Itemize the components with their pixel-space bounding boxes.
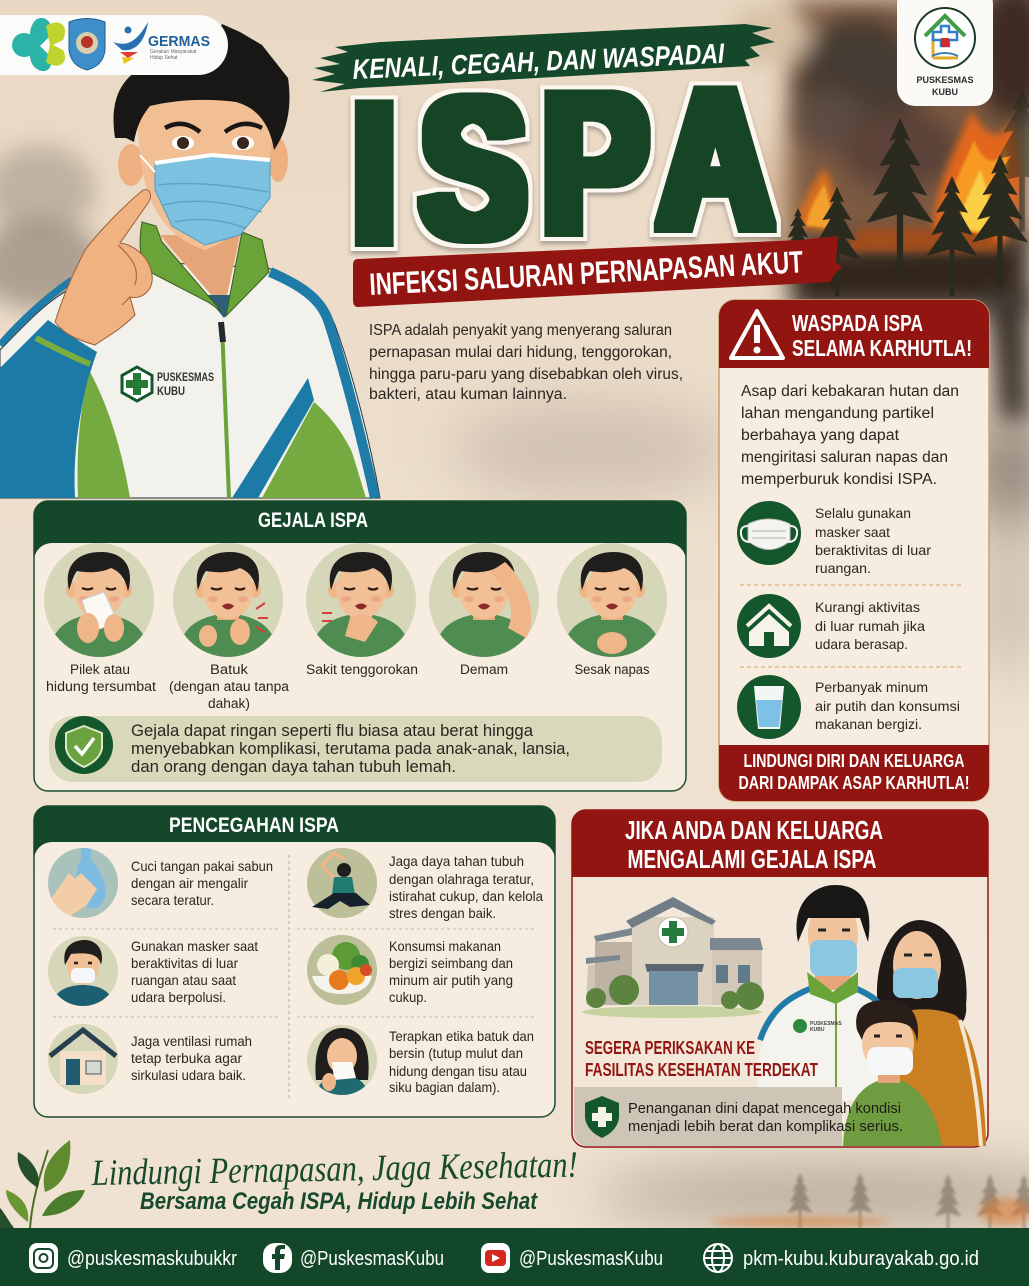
note: gejala: Gejala dapat ringan seperti flu biasa atau berat hingga [131,722,534,740]
note: early treatment: menjadi lebih berat dan komplikasi serius. [628,1119,903,1135]
tip: daya tahan: istirahat cukup, dan kelola [389,888,543,904]
note: early treatment: Penanganan dini dapat mencegah kondisi [628,1101,901,1117]
symptom: pilek [44,543,156,694]
tip: cuci tangan: Cuci tangan pakai sabun [131,858,273,874]
tip: cuci tangan [131,858,273,908]
footer bar: @PuskesmasKubu [300,1248,444,1270]
puskesmas badge [897,0,993,106]
panel: waspada ispa selama karhutla: WASPADA ISPA [792,310,923,336]
panel: waspada ispa selama karhutla [719,300,989,801]
footer bar: @PuskesmasKubu [519,1248,663,1270]
icon: puskesmas logo [915,8,975,68]
tip 2: Kurangi aktivitas [815,599,920,615]
tip: masker: ruangan atau saat [131,972,236,988]
symptom: batuk [169,543,289,711]
father [757,885,895,1100]
tip 1: ruangan. [815,560,871,576]
tip 2: di luar rumah jika [815,618,925,634]
intro text: hingga paru-paru yang disebabkan oleh virus, [369,366,683,383]
header logo pill [0,15,228,75]
icon: house ventilation [48,1024,118,1094]
tip 3: Perbanyak minum [815,679,928,695]
tip: makanan [389,938,513,1005]
symptom: demam: Demam [460,662,508,677]
title banner: green brush [312,24,775,92]
puskesmas badge: PUSKESMAS [916,75,974,85]
symptom: pilek: Pilek atau [70,662,130,677]
tip: daya tahan: stres dengan baik. [389,905,496,921]
logo on jacket: KUBU [157,384,185,398]
tip: ventilasi: Jaga ventilasi rumah [131,1033,252,1049]
footer bar: @puskesmaskubukkr [67,1248,237,1270]
symptom: batuk: dahak) [208,696,250,711]
panel: jika anda dan keluarga [572,810,988,1147]
waspada body text: lahan mengandung partikel [741,405,934,422]
tip: makanan: Konsumsi makanan [389,938,501,954]
icon: germas logo: GERMAS [148,34,210,50]
symptom: sesak napas [557,543,667,677]
panel: waspada ispa selama karhutla: SELAMA KARHUTLA! [792,335,972,361]
note: gejala: dan orang dengan daya tahan tubuh lemah. [131,758,456,776]
tip: etika batuk: hidung dengan tisu atau [389,1063,527,1079]
slogan: Lindungi Pernapasan, Jaga Kesehatan! [91,1145,578,1194]
tip: etika batuk: Terapkan etika batuk dan [389,1028,534,1044]
slogan [91,1145,578,1215]
tip: daya tahan [389,853,543,921]
icon: girl coughing [307,1025,377,1095]
tip 1 [815,505,931,576]
icon: glass of water [737,675,801,739]
intro text: pernapasan mulai dari hidung, tenggorokan, [369,344,672,361]
logo on jacket: PUSKESMAS [157,370,214,384]
icon: germas logo: Gerakan Masyarakat [150,49,197,55]
panel: gejala ispa: GEJALA ISPA [258,509,368,532]
icon: instagram [29,1243,58,1273]
icon: regency crest [69,18,105,70]
intro text: ISPA adalah penyakit yang menyerang saluran [369,322,672,339]
waspada footer: LINDUNGI DIRI DAN KELUARGA [744,751,964,771]
tip: masker: udara berpolusi. [131,989,226,1005]
symptom: pilek: hidung tersumbat [46,679,156,694]
icon: healthy food [307,935,377,1005]
icon: hand washing [48,848,118,918]
title banner: green brush: KENALI, CEGAH, DAN WASPADAI [352,38,726,85]
icon: website globe [704,1244,732,1272]
tip: masker: Gunakan masker saat [131,938,258,954]
tip: makanan: cukup. [389,989,427,1005]
footer bar [0,1228,1029,1286]
panel: jika anda dan keluarga: MENGALAMI GEJALA ISPA [628,844,877,874]
symptom: batuk: Batuk [210,662,248,677]
tip 1: masker saat [815,524,890,540]
icon: mask [737,501,801,565]
tip: cuci tangan: dengan air mengalir [131,875,248,891]
illustration: family with masks [574,885,986,1146]
tip: masker [131,938,258,1005]
icon: leaves [0,1140,85,1228]
tip 3: makanan bergizi. [815,716,922,732]
tip: daya tahan: Jaga daya tahan tubuh [389,853,524,869]
tip: etika batuk: bersin (tutup mulut dan [389,1045,523,1061]
tip: makanan: minum air putih yang [389,972,513,988]
intro text [369,322,683,403]
panel: jika anda dan keluarga: JIKA ANDA DAN KELUARGA [625,815,883,845]
waspada footer [719,745,989,801]
call to action text: SEGERA PERIKSAKAN KE [585,1037,755,1058]
icon: warning triangle [731,311,783,358]
waspada body text [741,383,959,488]
icon: shield cross [585,1096,619,1138]
panel: pencegahan ispa [34,806,555,1117]
waspada body text: memperburuk kondisi ISPA. [741,471,937,488]
illustration: boy pointing at mask [0,24,380,498]
note: early treatment [585,1096,903,1138]
symptom: demam [429,543,539,677]
tip 1: Selalu gunakan [815,505,911,521]
waspada footer: DARI DAMPAK ASAP KARHUTLA! [738,773,970,793]
icon: facebook [263,1243,292,1273]
mother [860,920,986,1146]
note: gejala [49,716,662,782]
intro text: bakteri, atau kuman lainnya. [369,386,567,403]
tip: ventilasi: tetap terbuka agar [131,1050,242,1066]
symptom: batuk: (dengan atau tanpa [169,679,289,694]
illustration: health center building [582,897,764,1018]
tip: cuci tangan: secara teratur. [131,892,214,908]
icon: house [737,594,801,658]
tip 1: beraktivitas di luar [815,542,931,558]
title: ISPA: ISPA [352,48,773,285]
slogan: Bersama Cegah ISPA, Hidup Lebih Sehat [140,1188,538,1215]
symptom: sesak napas: Sesak napas [574,662,650,677]
waspada body text: mengiritasi saluran napas dan [741,449,948,466]
child [843,1000,942,1146]
icon: youtube [481,1243,510,1273]
tip 2: udara berasap. [815,636,908,652]
panel: pencegahan ispa: PENCEGAHAN ISPA [169,814,339,837]
tip: etika batuk [389,1028,534,1095]
call to action text [585,1037,819,1080]
father: KUBU [810,1027,825,1033]
panel: gejala ispa [34,501,686,791]
tip: daya tahan: dengan olahraga teratur, [389,871,534,887]
waspada body text: Asap dari kebakaran hutan dan [741,383,959,400]
tip: etika batuk: siku bagian dalam). [389,1079,500,1095]
icon: germas logo [113,22,210,64]
puskesmas badge: KUBU [932,87,958,97]
tip: makanan: bergizi seimbang dan [389,955,513,971]
tip 3: air putih dan konsumsi [815,698,960,714]
call to action text: FASILITAS KESEHATAN TERDEKAT [585,1059,819,1080]
icon: boy with mask [48,936,118,1006]
tip: ventilasi: sirkulasi udara baik. [131,1067,246,1083]
symptom: sakit tenggorokan [306,543,418,677]
icon: exercise [307,848,377,918]
note: gejala: menyebabkan komplikasi, terutama pada anak-anak, lansia, [131,740,570,758]
logo on jacket [122,367,214,401]
tip: masker: beraktivitas di luar [131,955,238,971]
tip 3 [815,679,960,732]
symptom: sakit tenggorokan: Sakit tenggorokan [306,662,418,677]
waspada body text: berbahaya yang dapat [741,427,900,444]
icon: germas logo: Hidup Sehat [150,55,178,61]
father: PUSKESMAS [810,1021,842,1027]
icon: shield check [55,716,113,774]
footer bar: pkm-kubu.kuburayakab.go.id [743,1248,979,1270]
icon: ministry of health logo [12,18,65,71]
tip 2 [815,599,925,652]
subtitle banner: INFEKSI SALURAN PERNAPASAN AKUT [369,244,804,302]
tip: ventilasi [131,1033,252,1083]
